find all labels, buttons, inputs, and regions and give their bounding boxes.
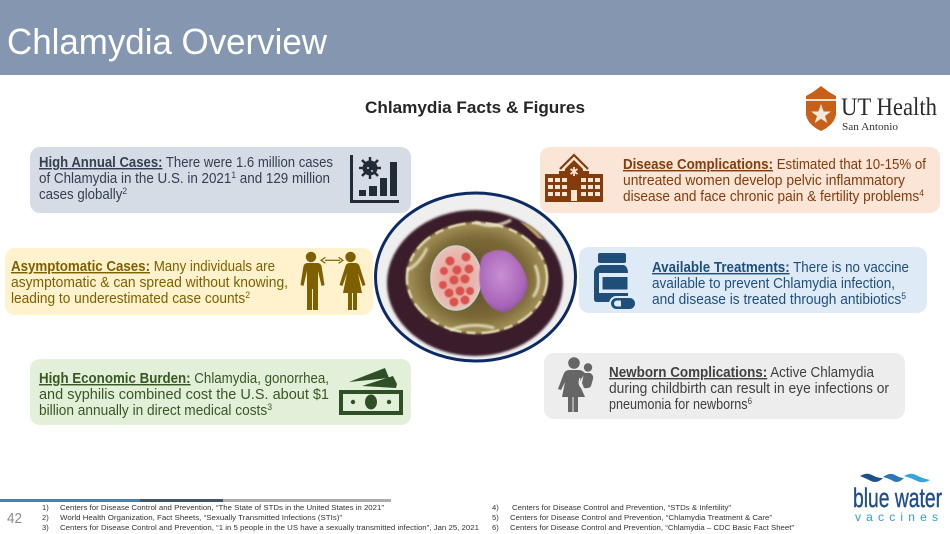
icon: mother holding baby xyxy=(558,357,593,412)
text: newborn complications: during childbirth can result in eye infections or xyxy=(609,381,889,397)
logo: UT Health San Antonio: UT Health xyxy=(841,94,937,121)
references right: 6) xyxy=(492,523,499,532)
references right xyxy=(492,503,794,532)
central image: chlamydia cell xyxy=(376,193,576,361)
icon: banknotes xyxy=(339,368,403,415)
text: newborn complications: 6 xyxy=(748,396,752,406)
text: high annual cases xyxy=(39,155,333,203)
text: high annual cases: 1 xyxy=(231,170,236,180)
panel: newborn complications xyxy=(544,353,905,419)
text: available treatments: 5 xyxy=(901,291,906,301)
references left: 3) xyxy=(42,523,49,532)
text: high annual cases: cases globally xyxy=(39,187,129,203)
text: disease complications: 4 xyxy=(919,188,924,198)
text: available treatments: Available Treatments: There is no vaccine xyxy=(652,260,909,276)
references left: World Health Organization, Fact Sheets, “Sexually Transmitted Infections (STIs)” xyxy=(60,513,342,522)
icon: pill bottle and capsule xyxy=(594,253,636,311)
icon: hospital building xyxy=(545,155,603,202)
section heading: Chlamydia Facts & Figures xyxy=(365,98,585,117)
references right: 4) xyxy=(492,503,499,512)
text: asymptomatic cases xyxy=(11,259,288,307)
panel: asymptomatic cases xyxy=(5,248,373,315)
page number: 42 xyxy=(7,510,22,527)
text: high economic burden: 3 xyxy=(267,402,272,412)
text: high economic burden: and syphilis combined cost the U.S. about $1 xyxy=(39,387,329,403)
text: high economic burden xyxy=(39,371,329,419)
footer rule xyxy=(0,499,391,502)
text: available treatments: and disease is treated through antibiotics xyxy=(652,292,912,308)
references right: Centers for Disease Control and Prevention, “Chlamydia – CDC Basic Fact Sheet” xyxy=(510,523,794,532)
references right: 5) xyxy=(492,513,499,522)
panel: high annual cases xyxy=(30,147,411,213)
references left xyxy=(42,503,479,532)
text: high annual cases: and 129 million xyxy=(236,171,330,187)
references left: Centers for Disease Control and Prevention, “The State of STDs in the United States in 2021” xyxy=(60,503,384,512)
header band xyxy=(0,0,950,75)
bacteria bodies xyxy=(439,252,474,306)
logo: blue water vaccines xyxy=(853,474,942,524)
text: newborn complications: Newborn Complications: Active Chlamydia xyxy=(609,365,874,381)
panel: available treatments xyxy=(579,247,927,313)
text: high economic burden: billion annually in direct medical costs xyxy=(39,403,277,419)
logo: blue water vaccines: vaccines xyxy=(855,510,938,524)
text: disease complications: Disease Complications: Estimated that 10-15% of xyxy=(623,157,926,173)
text: disease complications xyxy=(623,157,926,205)
text: available treatments xyxy=(652,260,909,308)
logo: UT Health San Antonio xyxy=(806,86,937,133)
text: newborn complications: pneumonia for newborns xyxy=(609,397,766,413)
references left: 2) xyxy=(42,513,49,522)
title: Chlamydia Overview xyxy=(7,21,328,62)
text: high annual cases: of Chlamydia in the U.S. in 2021 xyxy=(39,171,244,187)
cell micrograph xyxy=(387,210,563,356)
text: disease complications: disease and face chronic pain & fertility problems xyxy=(623,189,934,205)
panel: disease complications xyxy=(540,147,940,213)
logo: UT Health San Antonio: San Antonio xyxy=(842,121,899,133)
references right: Centers for Disease Control and Prevention, “STDs & Infertility” xyxy=(512,503,731,512)
text: newborn complications xyxy=(609,365,889,413)
text: asymptomatic cases: 2 xyxy=(245,290,250,300)
text: disease complications: untreated women develop pelvic inflammatory xyxy=(623,173,906,189)
text: available treatments: available to prevent Chlamydia infection, xyxy=(652,276,895,292)
icon: virus bar chart xyxy=(350,155,399,203)
text: asymptomatic cases: asymptomatic & can spread without knowing, xyxy=(11,275,288,291)
references left: 1) xyxy=(42,503,49,512)
text: asymptomatic cases: Asymptomatic Cases: Many individuals are xyxy=(11,259,275,275)
text: high economic burden: High Economic Burden: Chlamydia, gonorrhea, xyxy=(39,371,329,387)
panel: high economic burden xyxy=(30,359,411,425)
references right: Centers for Disease Control and Prevention, “Chlamydia Treatment & Care” xyxy=(510,513,772,522)
text: asymptomatic cases: leading to underestimated case counts xyxy=(11,291,256,307)
text: high annual cases: 2 xyxy=(122,186,127,196)
text: high annual cases: High Annual Cases: There were 1.6 million cases xyxy=(39,155,333,171)
references left: Centers for Disease Control and Prevention, “1 in 5 people in the US have a sexually transmitted infection”, Jan 25, 2021 xyxy=(60,523,479,532)
icon: man and woman with arrow xyxy=(300,252,366,310)
